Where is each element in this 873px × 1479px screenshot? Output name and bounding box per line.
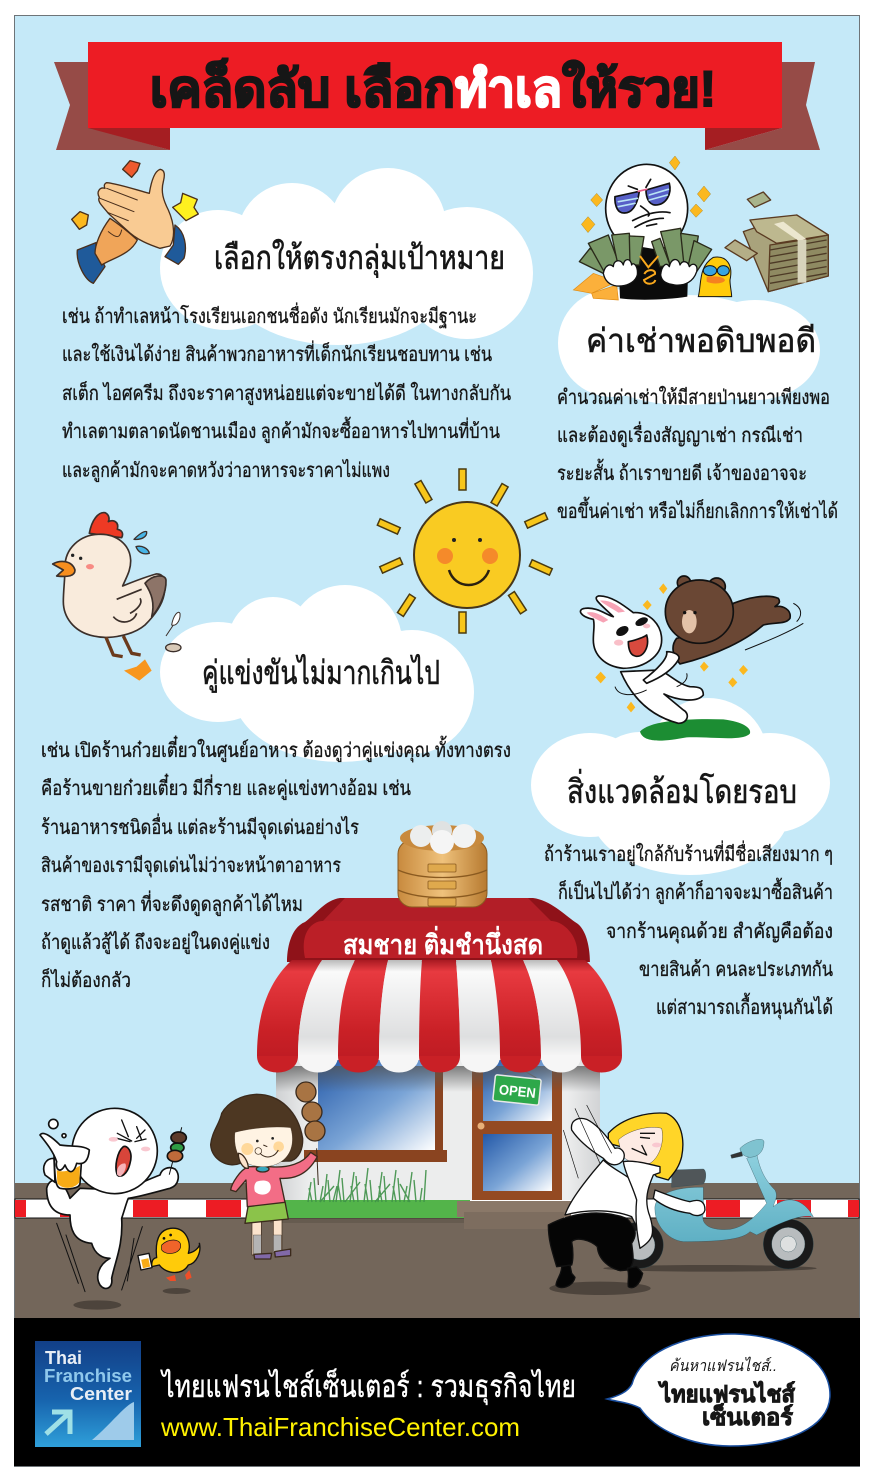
gold bars	[573, 273, 618, 300]
body	[565, 1160, 644, 1233]
icon: blonde man in shirt	[548, 1105, 705, 1295]
text block: target group: ทำเลตามตลาดนัดชานเมือง ลูกค้ามักจะซื้ออาหารไปทานที่บ้าน	[62, 417, 500, 444]
logo: Center	[70, 1384, 132, 1404]
sparkles	[595, 583, 748, 712]
footer url: www.ThaiFranchiseCenter.com	[160, 1412, 520, 1442]
text block: target group: สเต็ก ไอศครีม ถึงจะราคาสูงหน่อยแต่จะขายได้ดี ในทางกลับกัน	[62, 380, 511, 406]
text block: rent	[557, 386, 838, 523]
shop steps	[457, 1201, 571, 1229]
title ribbon	[54, 42, 820, 150]
text block: target group: เช่น ถ้าทำเลหน้าโรงเรียนเอกชนชื่อดัง นักเรียนมักจะมีฐานะ	[62, 302, 477, 328]
open sign	[493, 1065, 542, 1105]
text block: surroundings: จากร้านคุณด้วย สำคัญคือต้อง	[606, 921, 833, 944]
pants	[548, 1213, 635, 1271]
raised arm	[571, 1118, 624, 1165]
footer site name: ไทยแฟรนไชส์เซ็นเตอร์ : รวมธุรกิจไทย	[160, 1368, 576, 1406]
text block: surroundings: แต่สามารถเกื้อหนุนกันได้	[656, 993, 833, 1020]
text block: competitors: เช่น เปิดร้านก๋วยเตี๋ยวในศูนย์อาหาร ต้องดูว่าคู่แข่งคุณ ทั้งทางตรง	[41, 735, 511, 763]
head	[72, 1108, 157, 1194]
speech bubble: ไทยแฟรนไชส์	[657, 1380, 796, 1407]
text block: rent: และต้องดูเรื่องสัญญาเช่า กรณีเช่า	[557, 421, 803, 448]
heading: competitors: คู่แข่งขันไม่มากเกินไป	[202, 654, 440, 693]
icon: moon with beer	[40, 1108, 191, 1310]
title text: ให้รวย!	[562, 60, 716, 117]
grass strip	[270, 1200, 470, 1218]
text block: competitors: คือร้านขายก๋วยเตี๋ยว มีกี่ราย และคู่แข่งทางอ้อม เช่น	[41, 773, 411, 801]
shirt	[231, 1152, 317, 1207]
moon hands	[603, 260, 697, 286]
sparkles	[581, 156, 711, 233]
text block: competitors: รสชาติ ราคา ที่จะดึงดูดลูกค้าได้ไหม	[41, 890, 303, 917]
text block: surroundings: ขายสินค้า คนละประเภทกัน	[639, 959, 833, 981]
shrubs	[308, 1168, 426, 1202]
shop name: สมชาย ติ่มชำนึ่งสด	[343, 925, 543, 960]
logo: Thai	[45, 1348, 82, 1368]
icon: dim sum steamer	[398, 821, 487, 907]
text block: target group: และลูกค้ามักจะคาดหวังว่าอาหารจะราคาไม่แพง	[62, 459, 390, 483]
brown body	[673, 596, 790, 664]
moon head	[606, 164, 688, 252]
text block: competitors: ถ้าดูแล้วสู้ได้ ถึงจะอยู่ในดงคู่แข่ง	[41, 931, 270, 955]
cloud: rent	[558, 289, 820, 405]
text block: competitors: ร้านอาหารชนิดอื่น แต่ละร้านมีจุดเด่นอย่างไร	[41, 813, 359, 840]
other arm	[653, 1190, 705, 1216]
text block: target group: และใช้เงินได้ง่าย สินค้าพวกอาหารที่เด็กนักเรียนชอบทาน เช่น	[62, 340, 492, 366]
ribbon main band	[88, 42, 782, 128]
heading: target group: เลือกให้ตรงกลุ่มเป้าหมาย	[214, 239, 505, 278]
face	[235, 1127, 292, 1167]
rear wheel	[617, 1222, 663, 1268]
green grass mat	[640, 719, 750, 741]
body	[47, 1168, 178, 1288]
speech bubble: ค้นหาแฟรนไชส์..	[669, 1356, 777, 1375]
shirt tail	[623, 1161, 660, 1248]
icon: chicken	[53, 513, 181, 681]
road and barrier	[15, 1183, 859, 1318]
title text: ทำเล	[455, 61, 562, 117]
seat	[672, 1169, 706, 1187]
front wheel	[763, 1219, 813, 1269]
skirt	[245, 1202, 288, 1223]
title text	[150, 58, 716, 117]
hair	[608, 1113, 683, 1180]
text block: surroundings	[544, 840, 833, 1020]
logo	[35, 1341, 141, 1447]
footer band	[14, 1318, 860, 1466]
open sign: OPEN	[498, 1081, 537, 1101]
hair	[211, 1094, 303, 1165]
ribbon right tail	[705, 62, 820, 150]
cloud: surroundings	[531, 698, 830, 875]
wall	[276, 1050, 600, 1200]
icon: sun	[377, 469, 552, 633]
speech bubble: เซ็นเตอร์	[702, 1402, 794, 1430]
text block: competitors: สินค้าของเรามีจุดเด่นไม่ว่าจะหน้าตาอาหาร	[41, 854, 341, 878]
headlight	[740, 1139, 764, 1157]
legs	[252, 1218, 261, 1255]
frame	[655, 1153, 813, 1242]
speech bubble	[607, 1334, 830, 1446]
money stack	[725, 192, 828, 292]
heading: rent: ค่าเช่าพอดิบพอดี	[586, 322, 816, 359]
window	[304, 1060, 447, 1162]
icon: brown bear and cony	[580, 576, 803, 741]
logo: Franchise	[44, 1366, 132, 1386]
skewer	[169, 1128, 182, 1174]
ribbon left tail	[54, 62, 170, 150]
black body	[618, 247, 688, 300]
face	[618, 1127, 663, 1164]
text block: competitors: ก็ไม่ต้องกลัว	[41, 967, 131, 992]
door	[472, 1060, 562, 1200]
text block: competitors	[41, 735, 511, 992]
cloud: target group	[160, 168, 533, 345]
awning stripes	[257, 960, 622, 1072]
text block: target group	[62, 302, 511, 483]
road side barrier	[15, 1199, 859, 1218]
cloud: competitors	[160, 585, 474, 762]
heading: surroundings: สิ่งแวดล้อมโดยรอบ	[567, 769, 797, 810]
awning shadow	[276, 1066, 600, 1092]
icon: girl with meatballs	[211, 1082, 325, 1259]
icon: scooter	[603, 1139, 817, 1272]
cony body	[621, 670, 703, 723]
icon: clapping hands	[72, 161, 198, 283]
text block: rent: ระยะสั้น ถ้าเราขายดี เจ้าของอาจจะ	[557, 459, 807, 485]
icon: sally duck	[138, 1228, 200, 1281]
beer mug	[54, 1155, 82, 1189]
title text: เคล็ดลับ เลือก	[150, 58, 455, 117]
icon: moon with money	[573, 156, 828, 300]
shop	[257, 898, 622, 1223]
money fans	[579, 228, 712, 275]
meatballs	[296, 1082, 325, 1185]
awning roof	[287, 898, 590, 962]
sally duck	[698, 257, 732, 297]
